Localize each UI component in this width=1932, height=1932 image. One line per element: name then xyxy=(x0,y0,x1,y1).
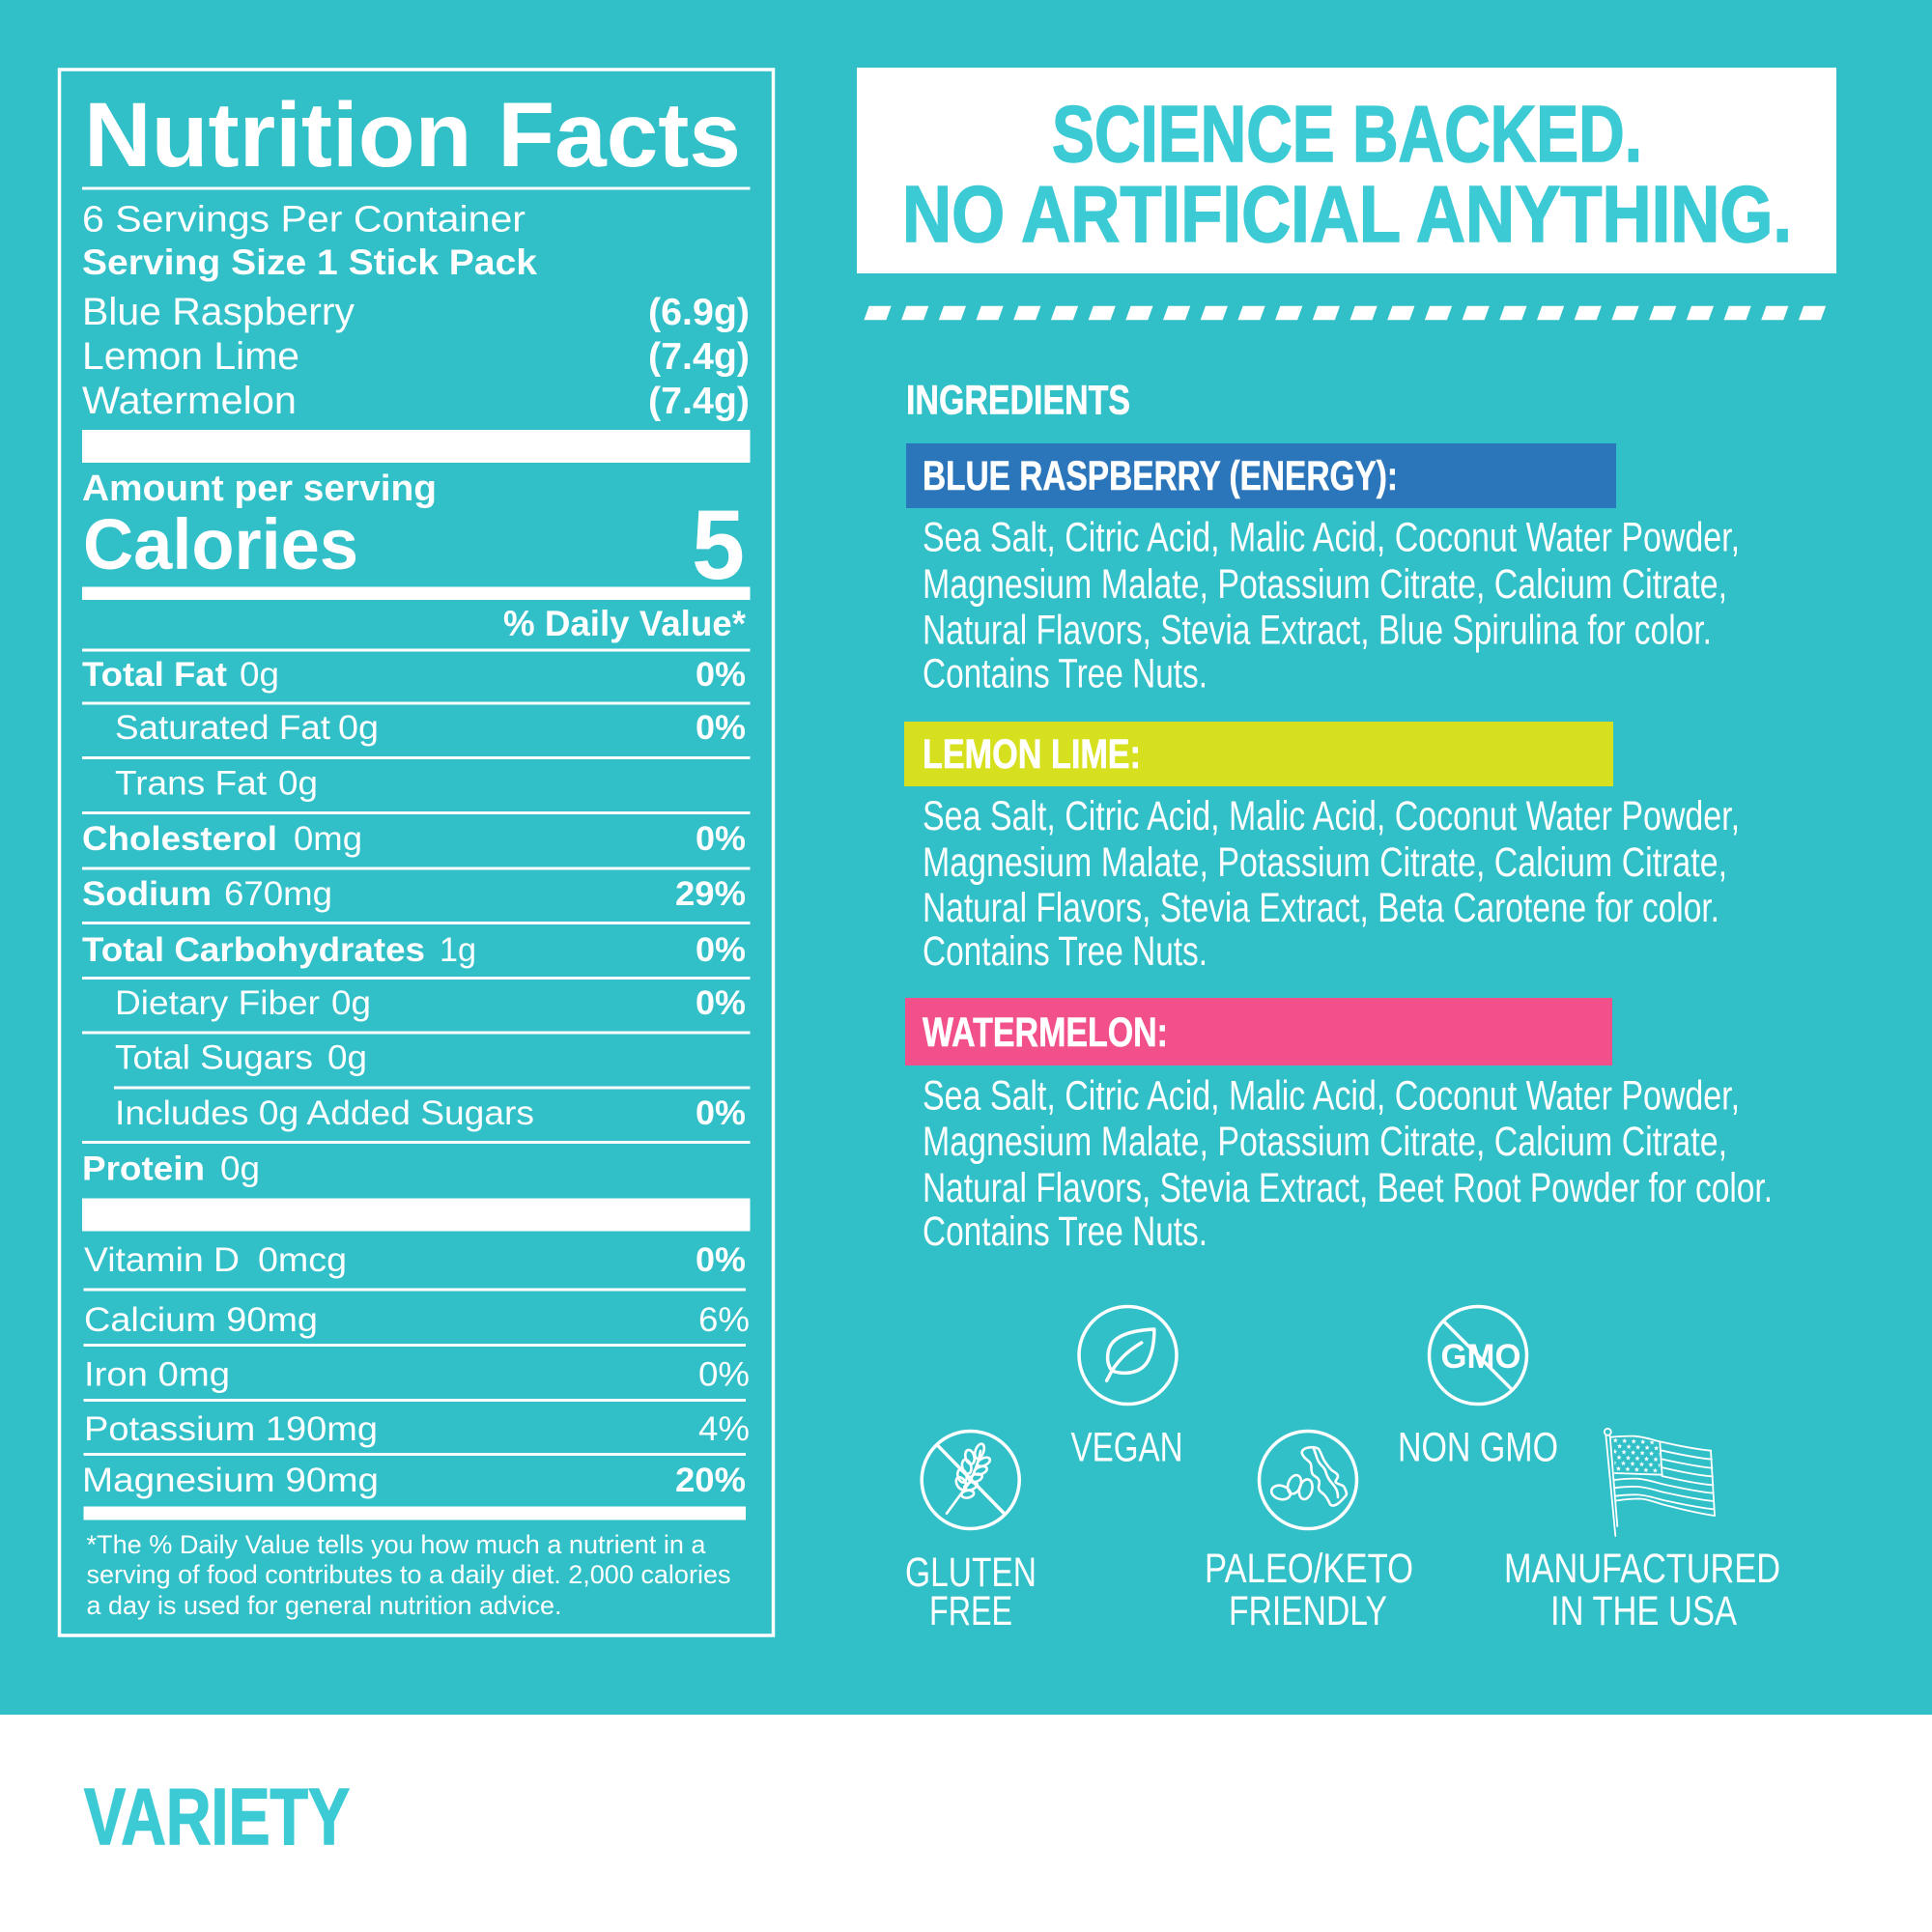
row: total carbohydrates xyxy=(82,931,746,969)
label bar: lemon lime xyxy=(904,722,1613,786)
row: potassium xyxy=(84,1410,750,1448)
ingredient list: blue raspberry: Natural Flavors, Stevia Extract, Blue Spirulina for color. xyxy=(923,607,1712,653)
headline banner: SCIENCE BACKED. xyxy=(1052,89,1642,179)
row: calcium xyxy=(84,1301,750,1339)
ingredient list: lemon lime: Sea Salt, Citric Acid, Malic Acid, Coconut Water Powder, xyxy=(923,793,1740,839)
icon: crossed GMO xyxy=(1430,1306,1526,1405)
row: added sugars: Includes 0g Added Sugars xyxy=(115,1094,534,1132)
badge: non GMO xyxy=(1398,1306,1558,1470)
title: Nutrition Facts: Nutrition Facts xyxy=(84,84,741,186)
flavor weights: (7.4g) xyxy=(648,381,750,422)
footnote: a day is used for general nutrition advice. xyxy=(87,1591,562,1620)
row: vitamin D: Vitamin D xyxy=(84,1241,240,1279)
row: total carbohydrates: 0% xyxy=(696,931,746,969)
icon: bacon and nuts xyxy=(1260,1432,1356,1528)
badge: manufactured in the USA: IN THE USA xyxy=(1550,1588,1737,1634)
panel: watermelon xyxy=(905,998,1773,1255)
footer label: variety: VARIETY xyxy=(84,1772,350,1861)
badge: non GMO: NON GMO xyxy=(1398,1424,1558,1470)
icon: leaf xyxy=(1079,1306,1177,1405)
row: potassium: 4% xyxy=(698,1410,750,1448)
badge: manufactured in the USA: MANUFACTURED xyxy=(1504,1546,1780,1592)
servings per container: 6 Servings Per Container xyxy=(82,199,526,240)
ingredient list: watermelon xyxy=(923,1072,1773,1255)
ingredient list: blue raspberry: Contains Tree Nuts. xyxy=(923,651,1208,697)
ingredient list: lemon lime: Contains Tree Nuts. xyxy=(923,928,1208,975)
badge: gluten free xyxy=(905,1432,1037,1634)
row: dietary fiber xyxy=(115,984,746,1022)
badge: vegan: VEGAN xyxy=(1070,1424,1182,1470)
row: saturated fat: Saturated Fat xyxy=(115,709,330,747)
row: potassium: Potassium 190mg xyxy=(84,1410,378,1448)
row: dietary fiber: Dietary Fiber xyxy=(115,984,320,1022)
flavor weights: Lemon Lime xyxy=(82,335,299,378)
flavor weights: (7.4g) xyxy=(648,336,750,378)
icon: crossed GMO: GMO xyxy=(1441,1338,1520,1376)
row: added sugars xyxy=(115,1094,746,1132)
badge: paleo keto friendly: PALEO/KETO xyxy=(1205,1546,1413,1592)
badge: gluten free: GLUTEN xyxy=(905,1549,1037,1596)
row: trans fat: 0g xyxy=(278,765,318,802)
calories: Calories xyxy=(83,504,358,584)
ingredient list: blue raspberry: Magnesium Malate, Potassium Citrate, Calcium Citrate, xyxy=(923,561,1727,608)
row: added sugars: 0% xyxy=(696,1094,746,1132)
label bar: watermelon xyxy=(905,998,1612,1065)
footnote: *The % Daily Value tells you how much a nutrient in a xyxy=(87,1530,706,1559)
flavor weights: (6.9g) xyxy=(648,292,750,333)
badge: manufactured in the USA xyxy=(1504,1429,1780,1634)
row: total fat xyxy=(82,656,746,694)
row: iron: 0% xyxy=(698,1356,750,1393)
calories xyxy=(83,490,745,600)
ingredient list: lemon lime xyxy=(923,793,1740,975)
ingredient list: watermelon: Magnesium Malate, Potassium Citrate, Calcium Citrate, xyxy=(923,1119,1727,1165)
row: total carbohydrates: 1g xyxy=(440,931,476,969)
row: sodium: 670mg xyxy=(224,875,332,913)
ingredient list: lemon lime: Magnesium Malate, Potassium Citrate, Calcium Citrate, xyxy=(923,839,1727,886)
row: dietary fiber: 0% xyxy=(696,984,746,1022)
row: total fat: 0% xyxy=(696,656,746,694)
row: saturated fat: 0g xyxy=(338,709,379,747)
serving size: Serving Size 1 Stick Pack xyxy=(82,242,537,282)
row: trans fat: Trans Fat xyxy=(115,765,267,802)
row: sodium xyxy=(82,875,746,913)
row: dietary fiber: 0g xyxy=(331,984,371,1022)
badge: paleo keto friendly: FRIENDLY xyxy=(1229,1588,1387,1634)
row: magnesium: 20% xyxy=(675,1462,746,1499)
row: total fat: 0g xyxy=(240,656,279,694)
flavor weights: Blue Raspberry xyxy=(82,291,355,333)
row: total sugars: Total Sugars xyxy=(115,1039,313,1076)
row: sodium: Sodium xyxy=(82,875,212,913)
row: magnesium xyxy=(82,1462,746,1499)
row: cholesterol: 0% xyxy=(696,820,746,858)
panel: nutrition facts xyxy=(60,70,773,1635)
label bar: watermelon: WATERMELON: xyxy=(923,1009,1168,1056)
label bar: blue raspberry xyxy=(906,443,1616,508)
row: total sugars: 0g xyxy=(327,1039,367,1076)
icon: American flag xyxy=(1605,1429,1715,1536)
ingredient list: blue raspberry: Sea Salt, Citric Acid, Malic Acid, Coconut Water Powder, xyxy=(923,514,1740,560)
label bar: lemon lime: LEMON LIME: xyxy=(923,731,1141,778)
flavor weights xyxy=(82,291,750,422)
label bar: blue raspberry: BLUE RASPBERRY (ENERGY): xyxy=(923,453,1398,499)
ingredient list: blue raspberry xyxy=(923,514,1740,697)
panel: lemon lime xyxy=(904,722,1740,975)
flavor weights: Watermelon xyxy=(82,380,297,422)
ingredient list: lemon lime: Natural Flavors, Stevia Extract, Beta Carotene for color. xyxy=(923,885,1719,931)
row: protein xyxy=(82,1150,260,1188)
panel: blue raspberry xyxy=(906,443,1740,697)
footnote xyxy=(87,1530,730,1620)
row: sodium: 29% xyxy=(675,875,746,913)
badge: paleo keto friendly xyxy=(1205,1432,1413,1634)
row: calcium: 6% xyxy=(698,1301,750,1339)
amount per serving: Amount per serving xyxy=(82,469,437,509)
icon: crossed wheat xyxy=(922,1432,1019,1528)
calories: 5 xyxy=(692,490,745,600)
headline banner xyxy=(857,68,1836,273)
row: cholesterol: Cholesterol xyxy=(82,820,277,858)
row: cholesterol xyxy=(82,820,746,858)
ingredients heading: INGREDIENTS xyxy=(906,377,1130,423)
ingredient list: watermelon: Sea Salt, Citric Acid, Malic Acid, Coconut Water Powder, xyxy=(923,1072,1740,1119)
row: calcium: Calcium 90mg xyxy=(84,1301,318,1339)
row: magnesium: Magnesium 90mg xyxy=(82,1462,379,1499)
row: iron xyxy=(84,1356,750,1393)
row: vitamin D xyxy=(84,1241,746,1279)
row: total carbohydrates: Total Carbohydrates xyxy=(82,931,425,969)
headline banner: NO ARTIFICIAL ANYTHING. xyxy=(902,169,1792,259)
row: iron: Iron 0mg xyxy=(84,1356,230,1393)
row: protein: Protein xyxy=(82,1150,205,1188)
daily value header: % Daily Value* xyxy=(503,604,747,643)
footnote: serving of food contributes to a daily diet. 2,000 calories xyxy=(87,1560,730,1589)
row: saturated fat: 0% xyxy=(696,709,746,747)
badge: gluten free: FREE xyxy=(929,1588,1012,1634)
row: vitamin D: 0% xyxy=(696,1241,746,1279)
row: vitamin D: 0mcg xyxy=(258,1241,347,1279)
badge: vegan xyxy=(1070,1306,1182,1470)
row: protein: 0g xyxy=(220,1150,260,1188)
row: total fat: Total Fat xyxy=(82,656,227,694)
row: saturated fat xyxy=(115,709,746,747)
ingredient list: watermelon: Contains Tree Nuts. xyxy=(923,1208,1208,1255)
row: cholesterol: 0mg xyxy=(294,820,362,858)
